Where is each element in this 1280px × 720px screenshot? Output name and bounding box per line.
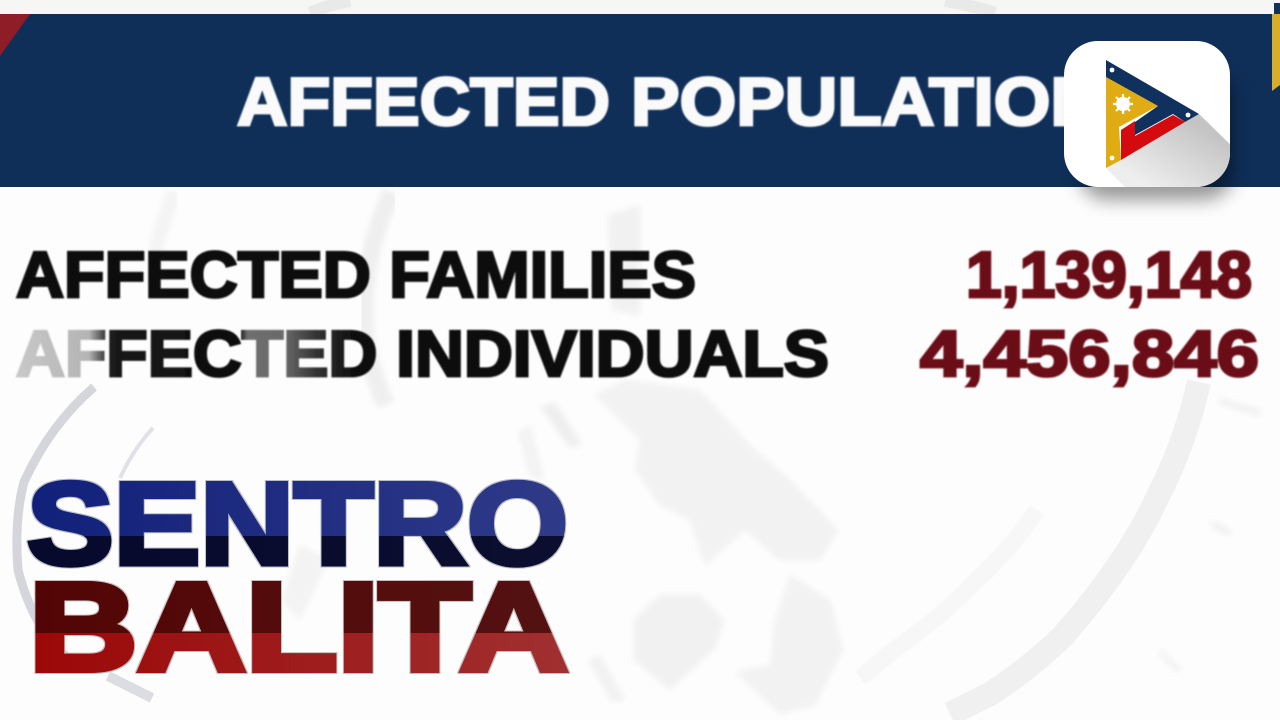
row label: affected families: AFFECTED FAMILIES [16, 238, 696, 311]
logo sun [1113, 94, 1133, 114]
logo long shadow [1106, 114, 1240, 187]
logotype: BALITA: BALITA [29, 558, 568, 697]
top banner [0, 14, 1280, 187]
logo yellow shape [1106, 77, 1158, 168]
row value: affected individuals: 4,456,846 [920, 317, 1259, 390]
logotype: SENTRO: SENTRO [27, 458, 568, 589]
logo stars [1110, 68, 1190, 160]
logo navy shape [1106, 60, 1199, 135]
banner title [237, 64, 1103, 140]
icon: app logo [1064, 41, 1240, 187]
gold accent at right edge [1272, 3, 1280, 91]
logo red shape [1121, 115, 1185, 160]
banner title: AFFECTED [237, 64, 610, 140]
row label: affected individuals: AFFECTED INDIVIDUALS [16, 317, 829, 390]
row value: affected families: 1,139,148 [966, 238, 1252, 311]
banner title: POPULATION [631, 64, 1103, 140]
red corner accent [0, 14, 30, 56]
background: top strip [0, 0, 1280, 14]
logo shadow [1078, 70, 1234, 200]
